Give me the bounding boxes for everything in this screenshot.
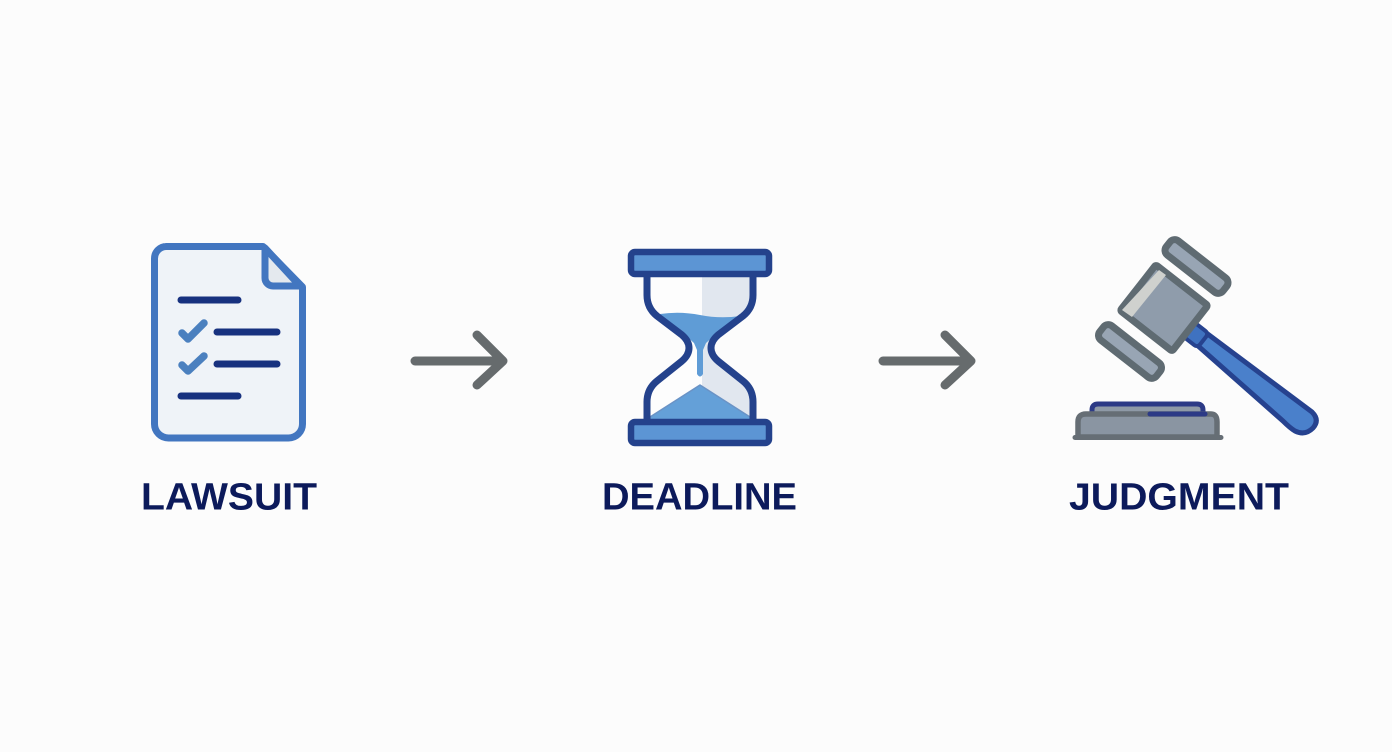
label: judgment: JUDGMENT	[1069, 476, 1289, 518]
arrow: deadline to judgment	[883, 335, 971, 385]
icon: lawsuit document	[154, 246, 302, 438]
icon: gavel	[1075, 237, 1316, 438]
label: deadline: DEADLINE	[602, 476, 797, 518]
label: lawsuit: LAWSUIT	[141, 476, 317, 518]
icon: hourglass	[631, 252, 769, 443]
arrow: lawsuit to deadline	[415, 335, 503, 385]
